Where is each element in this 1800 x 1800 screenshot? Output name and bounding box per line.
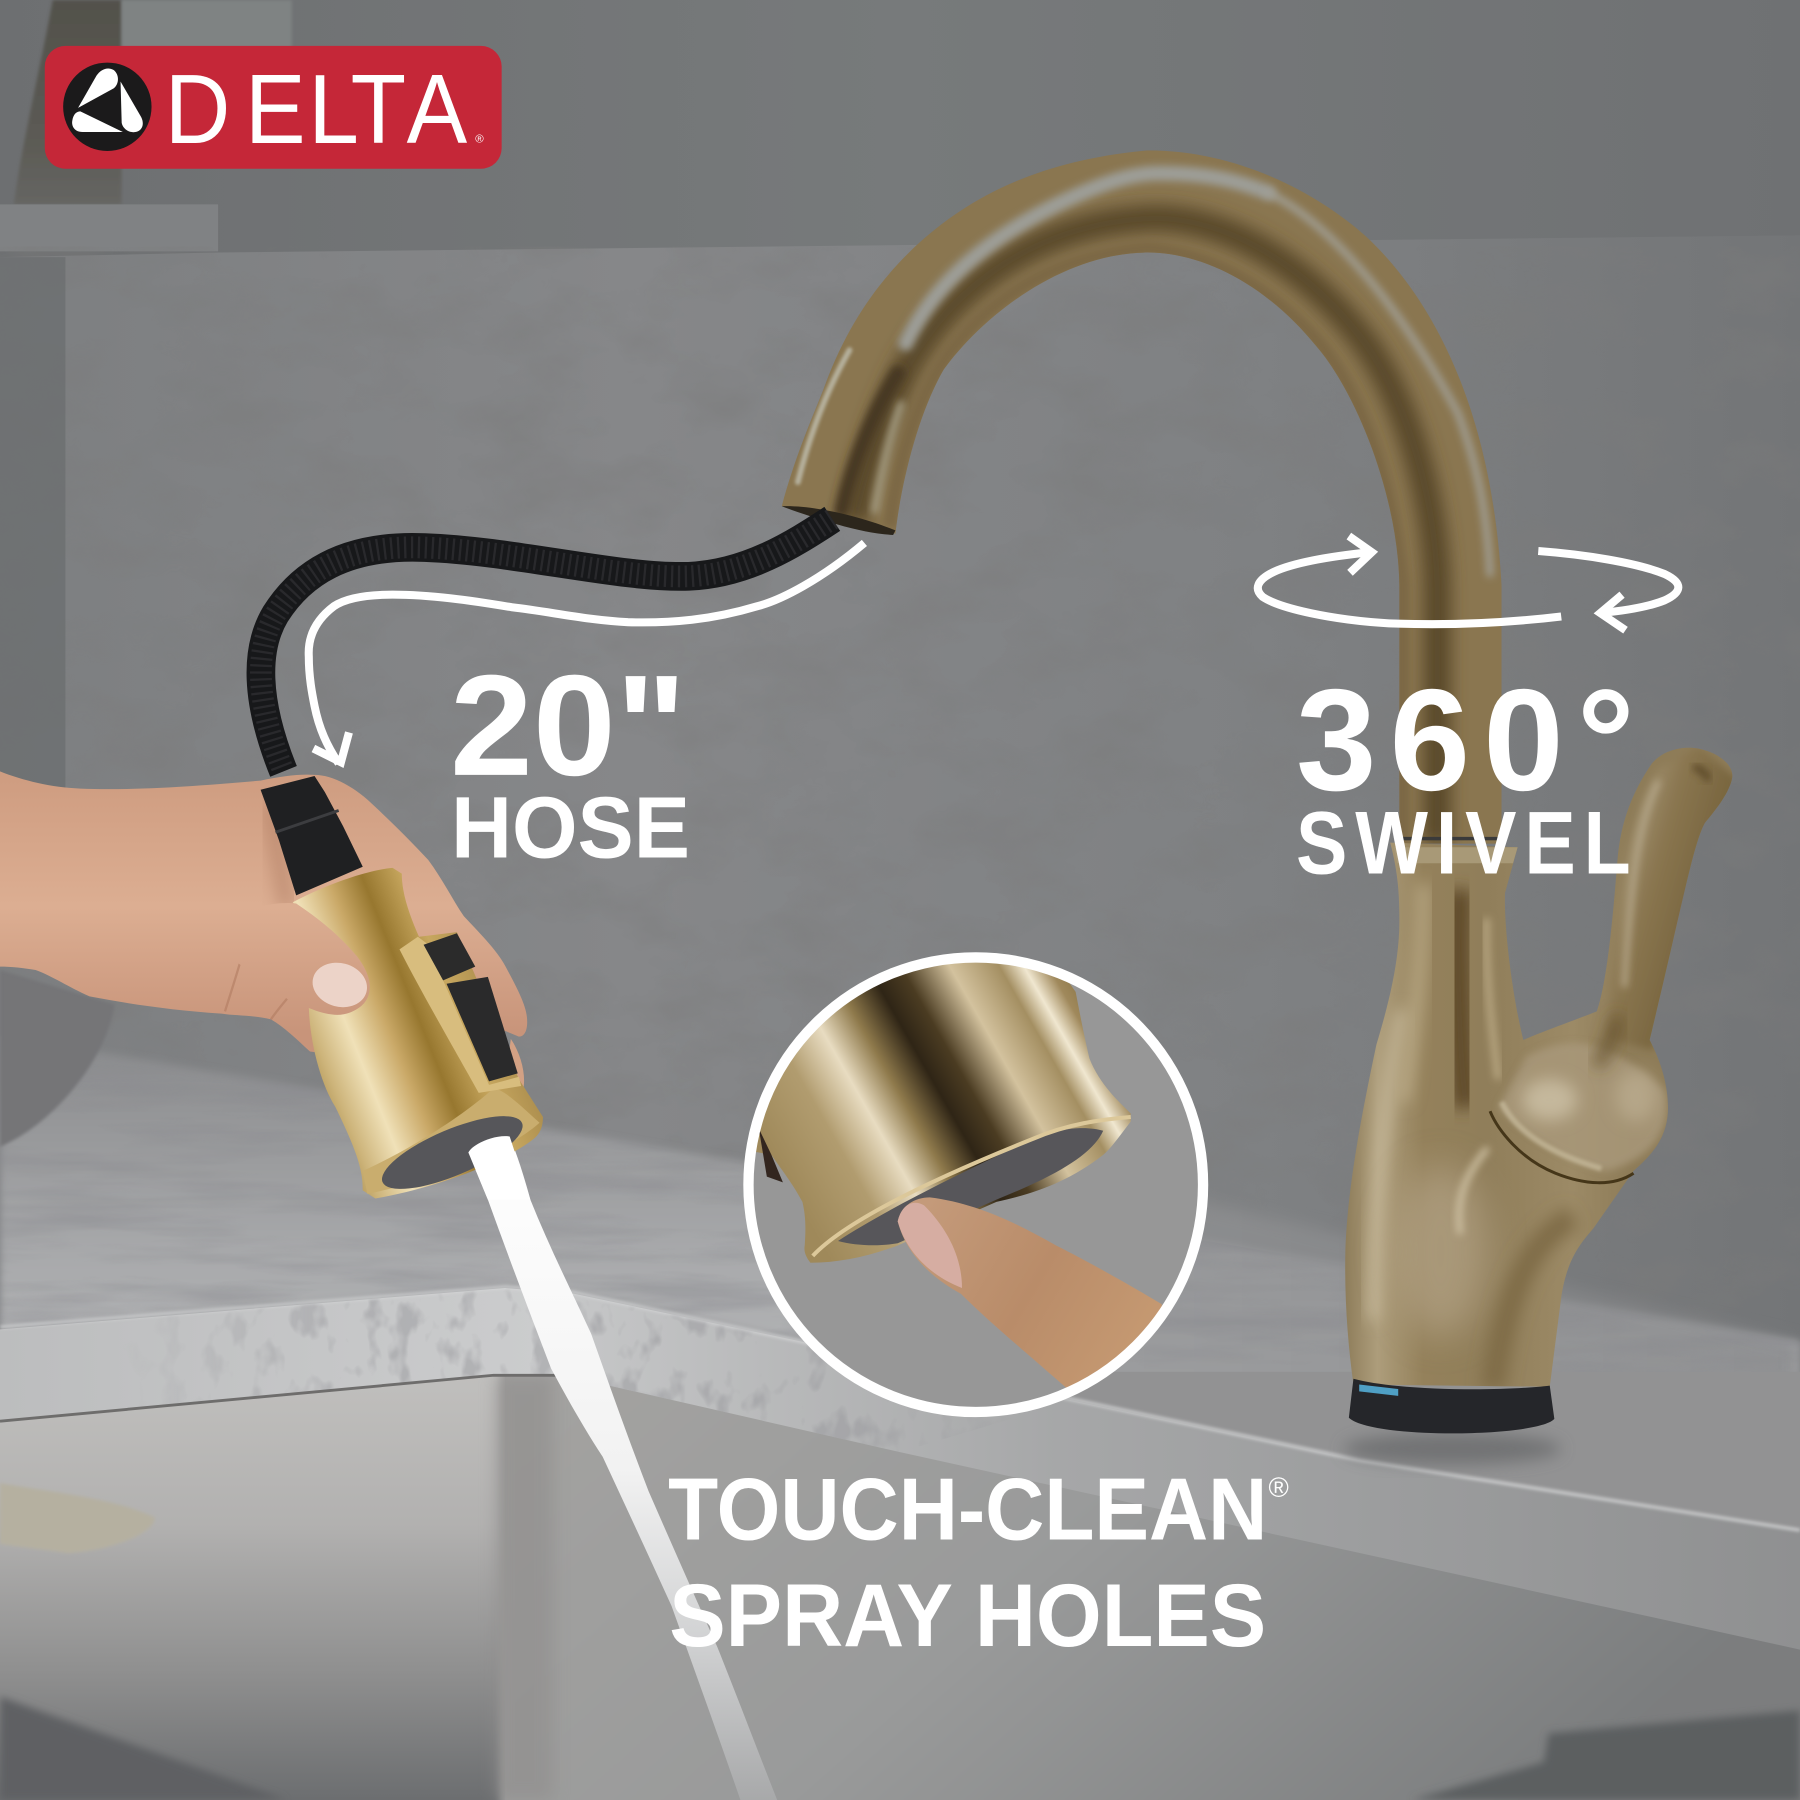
shadow beside connector <box>270 804 287 907</box>
sink corner shade <box>496 1375 553 1800</box>
fingernail <box>898 1203 962 1288</box>
swivel label: 360° <box>1296 659 1635 821</box>
sink bottom right shadow <box>1412 1710 1800 1800</box>
spray face <box>374 1102 531 1203</box>
finger crease <box>271 999 287 1019</box>
left arrow head <box>1349 536 1372 573</box>
touch-clean label: TOUCH-CLEAN <box>668 1459 1267 1558</box>
gooseneck spout and column <box>769 138 1515 849</box>
circle outline <box>748 957 1203 1412</box>
water stream <box>468 1136 777 1800</box>
counter edge highlight <box>0 1287 1800 1530</box>
right arrow head <box>1600 595 1626 630</box>
collar gap <box>1399 837 1502 840</box>
lower button <box>447 977 518 1081</box>
swivel arrows <box>1258 536 1678 630</box>
red badge <box>45 46 502 169</box>
sink corner and right wall <box>501 1366 1800 1800</box>
second line: SPRAY HOLES <box>669 1565 1266 1665</box>
hose length label: 20" <box>450 646 686 806</box>
triangle mark <box>72 68 143 132</box>
thumb <box>212 903 372 1015</box>
registered mark: ® <box>475 133 484 145</box>
inset circle: touch-clean detail <box>735 941 1203 1412</box>
black circle <box>63 63 152 151</box>
hose length arrow <box>309 543 864 763</box>
rim flare <box>363 1088 540 1194</box>
residue blob on sink <box>0 1483 155 1553</box>
counter edge right <box>562 1294 1800 1650</box>
water at spray face <box>468 1136 530 1200</box>
fingertip <box>898 1197 1162 1389</box>
sink bottom left shadow <box>0 1697 287 1800</box>
edge speckles <box>206 1291 897 1446</box>
pale cylinder <box>122 0 292 53</box>
arrow head <box>313 732 349 762</box>
counter vein texture <box>8 1172 800 1337</box>
black base ring <box>1349 1379 1554 1433</box>
spout mouth <box>782 506 895 535</box>
right arc <box>1538 551 1678 613</box>
touch-clean label <box>668 1459 1289 1665</box>
faucet body and handle <box>1345 746 1739 1389</box>
handle seam ring <box>1490 1111 1634 1183</box>
hose length label <box>450 646 690 877</box>
left wall strip <box>0 257 65 797</box>
palm crease <box>225 955 242 1011</box>
connector ribs <box>276 810 339 832</box>
edge shadow line <box>0 1375 562 1421</box>
upper wall <box>0 0 1800 264</box>
column behind shelf <box>14 0 122 204</box>
sprayhose <box>261 519 832 895</box>
bell button sliver <box>759 1128 783 1182</box>
thumbnail <box>308 957 372 1013</box>
gold button plate <box>399 937 521 1093</box>
registered mark: ® <box>1268 1472 1289 1503</box>
SWIVEL word: SWIVEL <box>1296 792 1631 893</box>
pull-down sprayer <box>293 868 543 1203</box>
sink left wall <box>0 1375 505 1800</box>
circle fill <box>748 957 1203 1412</box>
counter right tone <box>1072 1171 1800 1544</box>
spray nozzle underside <box>838 1128 1103 1245</box>
sink base tone <box>0 1372 1800 1800</box>
HOSE word: HOSE <box>451 780 690 877</box>
counter edge left <box>0 1288 574 1421</box>
marble wall <box>0 235 1800 1378</box>
Delta logo <box>45 46 502 169</box>
bell rim highlight <box>813 1117 1131 1256</box>
swivel label <box>1296 659 1635 893</box>
hose connector <box>261 776 363 895</box>
counter top surface <box>0 1035 1800 1544</box>
collar <box>1394 847 1518 863</box>
blue LED indicator <box>1359 1384 1398 1396</box>
top button <box>424 933 475 980</box>
wall marble texture <box>0 247 1800 1349</box>
braid texture <box>261 519 832 771</box>
ring highlight <box>1502 1102 1601 1169</box>
lower finger sliver <box>505 1039 524 1093</box>
shelf <box>0 204 218 251</box>
sprayer bell <box>756 962 1131 1263</box>
bowl at left <box>0 970 115 1147</box>
wordmark: DELTA <box>165 54 468 165</box>
hand <box>0 771 527 1093</box>
faucet <box>769 138 1739 1465</box>
faucet base shadow <box>1343 1433 1561 1465</box>
